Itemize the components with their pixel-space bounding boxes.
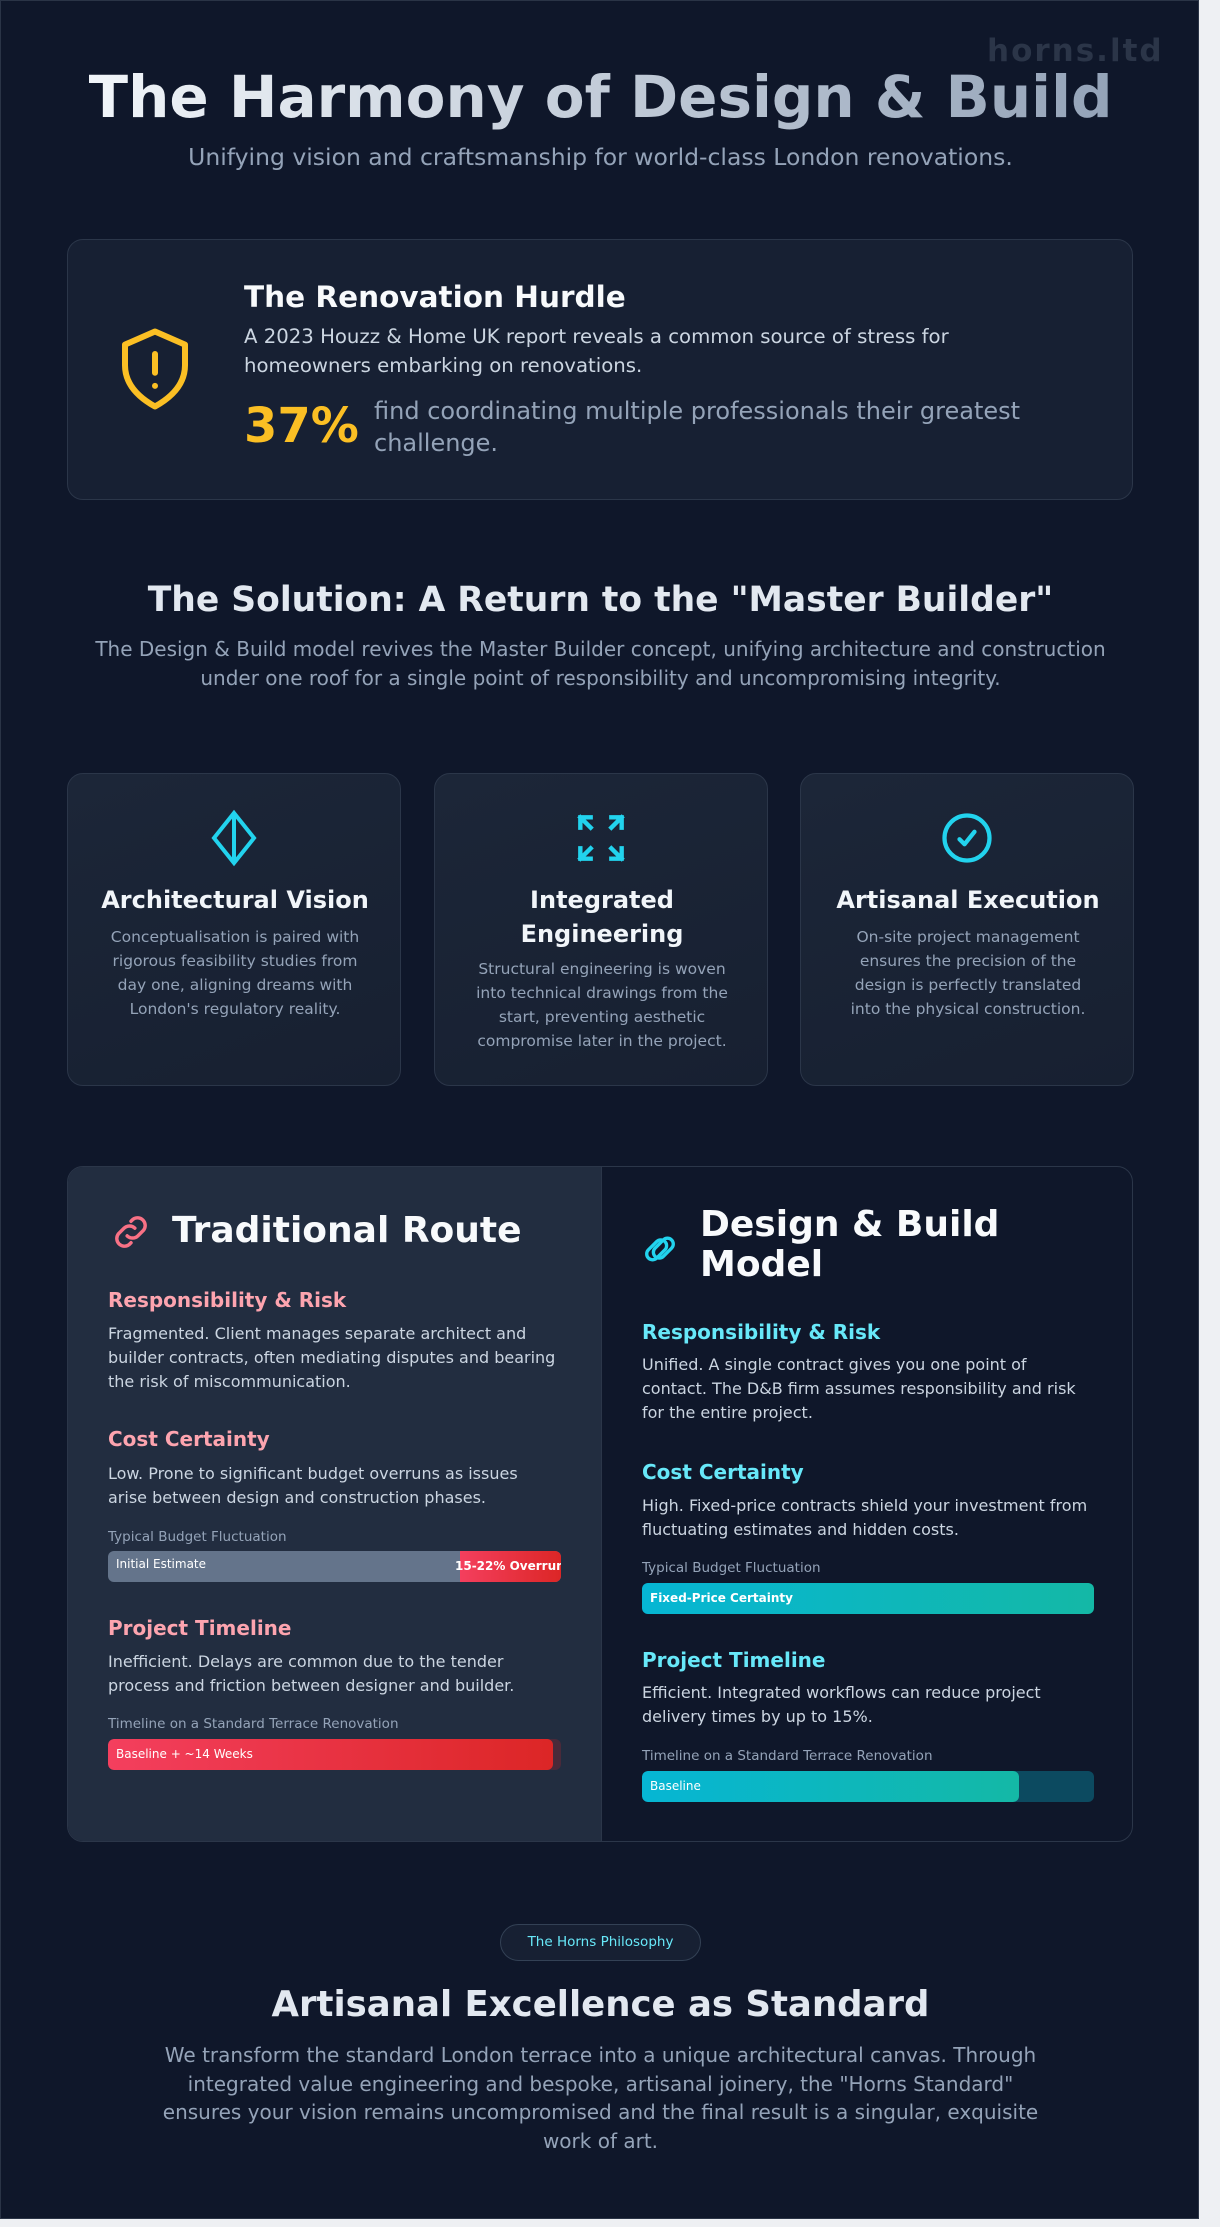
- heading: [700, 1204, 999, 1285]
- panel: integrated engineering: [434, 773, 768, 1086]
- card title: [521, 886, 683, 948]
- card title: Artisanal Execution: [836, 886, 1100, 914]
- text: philosophy: We transform the standard London terrace into a unique architectural canvas. Through integrated value engineering and bespoke, artisanal joinery, the "Horns Standard" ensures your vision remains uncompromised and the final result is a singular, exquisite work of art.: [163, 2043, 1038, 2152]
- text: Fragmented. Client manages separate architect and builder contracts, often mediating disputes and bearing the risk of miscommunication.: [108, 1324, 555, 1391]
- heading: Model: [700, 1244, 823, 1285]
- pill: horns philosophy: The Horns Philosophy: [528, 1934, 673, 1950]
- panel: artisanal execution: [800, 773, 1134, 1086]
- subheading: timeline: Project Timeline: [642, 1648, 825, 1672]
- icon: arrows: [577, 814, 625, 862]
- card title: Integrated: [530, 886, 674, 914]
- bar: baseline: [642, 1771, 1094, 1802]
- bar: timeline: [108, 1739, 561, 1770]
- heading: solution: The Solution: A Return to the "Master Builder": [148, 580, 1053, 620]
- bar: fixed price: [642, 1583, 1094, 1614]
- panel: architectural vision: [67, 773, 401, 1086]
- icon: check circle: [942, 813, 992, 863]
- stat 37%: find coordinating multiple professionals their greatest challenge.: [374, 397, 1020, 457]
- bar: baseline: Baseline: [650, 1779, 701, 1793]
- panel: traditional route: [68, 1167, 602, 1843]
- stat 37%: 37%: [244, 398, 359, 454]
- bar: budget: Initial Estimate: [116, 1557, 206, 1571]
- text: High. Fixed-price contracts shield your investment from fluctuating estimates and hidden costs.: [642, 1496, 1087, 1539]
- icon: shield warning: [122, 328, 188, 410]
- heading: artisanal excellence: Artisanal Excellence as Standard: [272, 1984, 929, 2025]
- watermark: horns.ltd: [987, 33, 1164, 69]
- text: solution description: The Design & Build model revives the Master Builder concept, unifying architecture and construction under one roof for a single point of responsibility and uncompromising integrity.: [95, 637, 1106, 690]
- bar: fixed price: Fixed-Price Certainty: [650, 1591, 793, 1605]
- subheading: cost: Cost Certainty: [108, 1427, 270, 1451]
- subtitle: Unifying vision and craftsmanship for world-class London renovations.: [188, 143, 1013, 171]
- text: Inefficient. Delays are common due to the tender process and friction between designer and builder.: [108, 1652, 514, 1695]
- text: Efficient. Integrated workflows can reduce project delivery times by up to 15%.: [642, 1683, 1041, 1726]
- heading: The Renovation Hurdle: [244, 280, 626, 314]
- text block: A 2023 Houzz & Home UK report reveals a common source of stress for homeowners embarking on renovations.: [244, 325, 949, 377]
- icon: broken link: [115, 1216, 147, 1248]
- bar: budget: [108, 1551, 561, 1582]
- panel: comparison: [67, 1166, 1133, 1842]
- text: Low. Prone to significant budget overruns as issues arise between design and construction phases.: [108, 1464, 518, 1507]
- heading: Traditional Route: [172, 1210, 522, 1251]
- pill: horns philosophy: [500, 1924, 701, 1961]
- card text: Conceptualisation is paired with rigorous feasibility studies from day one, aligning dreams with London's regulatory reality.: [111, 928, 359, 1018]
- card text: On-site project management ensures the precision of the design is perfectly translated into the physical construction.: [851, 928, 1085, 1018]
- icon: link: [645, 1236, 675, 1262]
- subheading: responsibility: Responsibility & Risk: [642, 1320, 880, 1344]
- label: Typical Budget Fluctuation: [642, 1560, 821, 1576]
- text: Unified. A single contract gives you one point of contact. The D&B firm assumes responsibility and risk for the entire project.: [642, 1355, 1076, 1422]
- label: Timeline on a Standard Terrace Renovation: [108, 1716, 399, 1732]
- bar: timeline: Baseline + ~14 Weeks: [116, 1747, 253, 1761]
- subheading: cost: Cost Certainty: [642, 1460, 804, 1484]
- subheading: responsibility: Responsibility & Risk: [108, 1288, 346, 1312]
- panel: design & build: [642, 1204, 1094, 1802]
- heading: Design & Build: [700, 1204, 999, 1245]
- icon: diamond: [212, 810, 256, 866]
- label: Typical Budget Fluctuation: [108, 1529, 287, 1545]
- title: The Harmony of Design & Build: [89, 63, 1112, 131]
- card text: Structural engineering is woven into technical drawings from the start, preventing aesthetic compromise later in the project.: [476, 960, 728, 1050]
- label: Timeline on a Standard Terrace Renovation: [642, 1748, 933, 1764]
- subheading: timeline: Project Timeline: [108, 1616, 291, 1640]
- card title: Engineering: [521, 920, 683, 948]
- card title: Architectural Vision: [101, 886, 369, 914]
- panel: renovation hurdle: [67, 239, 1133, 500]
